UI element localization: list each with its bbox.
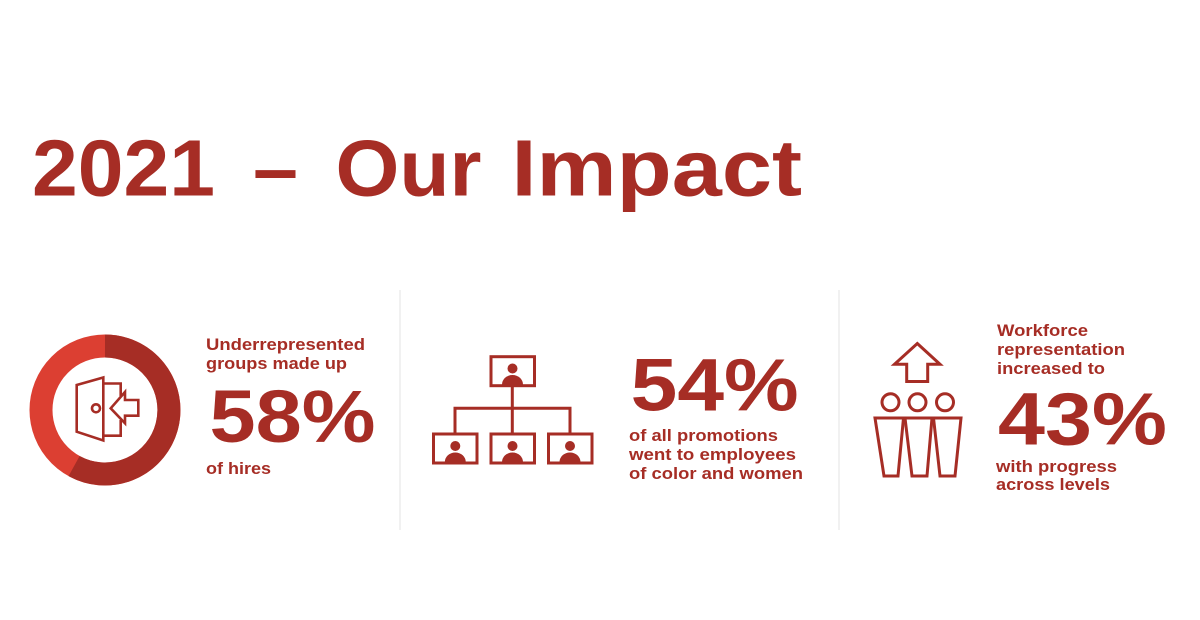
icon: donut chart with door — [41, 346, 169, 474]
text: hires lead-in: groups made up — [206, 354, 347, 373]
text: workforce description — [995, 457, 1117, 494]
title: Our — [336, 124, 482, 212]
icon: org chart — [434, 357, 592, 463]
text: promotions description — [628, 426, 803, 483]
panel: promotions — [434, 344, 803, 483]
text: promotions description: of color and women — [629, 464, 803, 483]
text: hires lead-in: Underrepresented — [206, 335, 365, 354]
panel: hires — [41, 335, 376, 478]
title: 2021 — [32, 124, 215, 212]
text: workforce lead-in: increased to — [997, 359, 1105, 378]
panel: workforce — [875, 321, 1167, 494]
stat: 54%: 54% — [631, 344, 799, 426]
text: workforce lead-in: Workforce — [997, 321, 1088, 340]
stat: 43%: 43% — [998, 378, 1167, 460]
title: – — [253, 124, 298, 212]
text: workforce lead-in — [997, 321, 1125, 378]
title — [32, 124, 802, 212]
text: workforce description: across levels — [996, 475, 1110, 494]
text: promotions description: went to employees — [628, 445, 796, 464]
stat: 58%: 58% — [210, 375, 376, 458]
text: workforce lead-in: representation — [997, 340, 1125, 359]
title: Impact — [512, 124, 802, 212]
text: workforce description: with progress — [995, 457, 1117, 476]
text: hires lead-in — [206, 335, 365, 373]
text: of hires: of hires — [206, 459, 271, 478]
text: promotions description: of all promotions — [629, 426, 778, 445]
icon: people with up arrow — [875, 344, 961, 476]
